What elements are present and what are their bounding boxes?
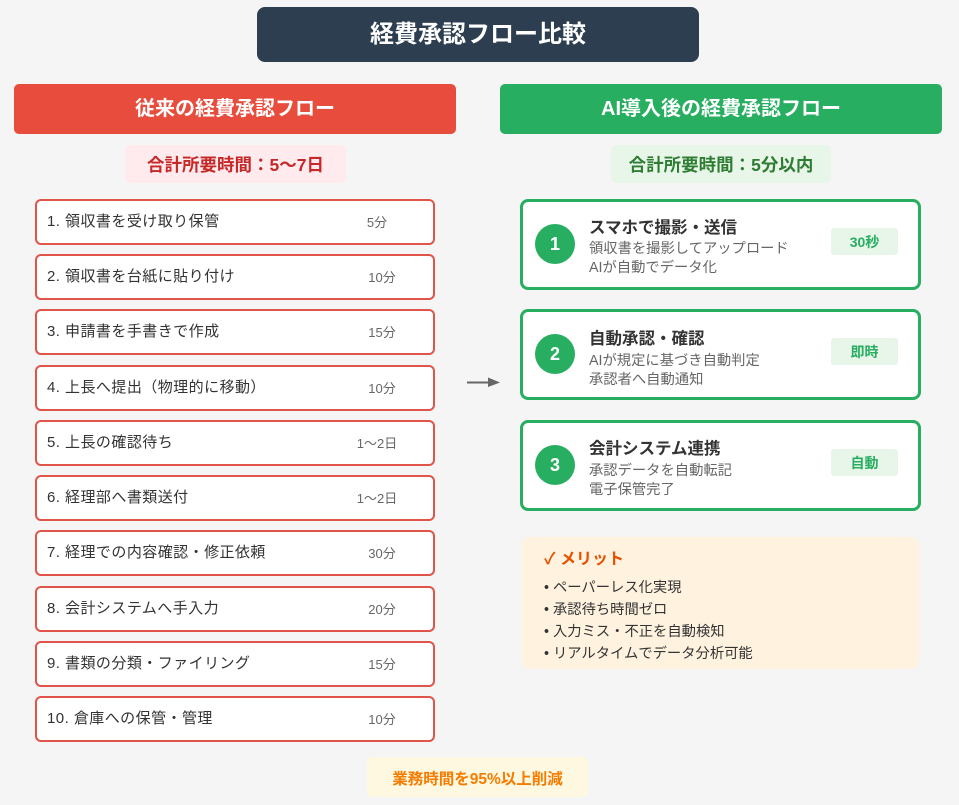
merits list xyxy=(544,580,753,662)
step 8: 20分 xyxy=(368,602,396,617)
step 8: 8. 会計システムへ手入力 xyxy=(47,600,219,616)
heading: AI flow: AI導入後の経費承認フロー xyxy=(601,98,841,120)
card title: スマホで撮影・送信 xyxy=(589,219,737,237)
number badge 2 xyxy=(535,334,575,374)
time badge: 30秒 xyxy=(850,234,879,250)
step 4: 10分 xyxy=(368,381,396,396)
step 6: 6. 経理部へ書類送付 xyxy=(47,488,189,506)
card description: 承認者へ自動通知 xyxy=(589,372,703,388)
step 10 xyxy=(35,696,435,742)
card description: AIが自動でデータ化 xyxy=(589,260,717,276)
card: step 3 xyxy=(520,420,921,511)
card description: AIが規定に基づき自動判定 xyxy=(589,352,760,368)
step 5 xyxy=(35,420,435,466)
step 1: 5分 xyxy=(367,215,387,230)
panel: merits xyxy=(522,537,919,669)
step 7: 7. 経理での内容確認・修正依頼 xyxy=(47,544,266,560)
step 1 xyxy=(35,199,435,245)
total time: traditional xyxy=(125,145,346,183)
card description xyxy=(589,352,760,388)
step 6: 1〜2日 xyxy=(357,491,397,506)
heading: AI flow xyxy=(500,84,942,134)
step 2: 2. 領収書を台紙に貼り付け xyxy=(47,268,235,284)
time badge xyxy=(831,228,898,255)
title: 経費承認フロー比較 xyxy=(370,21,586,48)
step 3 xyxy=(35,309,435,355)
arrow xyxy=(467,378,500,387)
step 4 xyxy=(35,365,435,411)
heading: traditional flow: 従来の経費承認フロー xyxy=(135,98,335,120)
number badge 2: 2 xyxy=(550,344,560,364)
time badge: 自動 xyxy=(850,454,878,470)
merits list: • 入力ミス・不正を自動検知 xyxy=(544,624,725,640)
card title: 会計システム連携 xyxy=(589,440,721,458)
step 10: 10分 xyxy=(368,712,396,727)
merits list: • リアルタイムでデータ分析可能 xyxy=(544,646,753,662)
step 7 xyxy=(35,530,435,576)
step 3: 15分 xyxy=(368,325,396,340)
step 2: 10分 xyxy=(368,270,396,285)
card description: 電子保管完了 xyxy=(589,482,675,498)
step 2 xyxy=(35,254,435,300)
merits list: • ペーパーレス化実現 xyxy=(544,580,682,596)
time badge xyxy=(831,449,898,476)
merits list: • 承認待ち時間ゼロ xyxy=(544,602,667,618)
step 1: 1. 領収書を受け取り保管 xyxy=(47,212,220,230)
callout: 95% reduction: 業務時間を95%以上削減 xyxy=(392,771,563,788)
step 3: 3. 申請書を手書きで作成 xyxy=(47,322,220,340)
step 10: 10. 倉庫への保管・管理 xyxy=(47,710,213,726)
time badge xyxy=(831,338,898,365)
step 5: 5. 上長の確認待ち xyxy=(47,434,173,450)
card: step 2 xyxy=(520,309,921,400)
title xyxy=(257,7,699,62)
card: step 1 xyxy=(520,199,921,290)
card description: 領収書を撮影してアップロード xyxy=(589,241,789,257)
callout: 95% reduction xyxy=(367,757,588,797)
step 9: 9. 書類の分類・ファイリング xyxy=(47,654,250,672)
step 7: 30分 xyxy=(368,546,396,561)
total time: traditional: 合計所要時間：5〜7日 xyxy=(147,154,324,174)
step 9: 15分 xyxy=(368,657,396,672)
card title: 自動承認・確認 xyxy=(589,330,704,348)
step 8 xyxy=(35,586,435,632)
step 4: 4. 上長へ提出（物理的に移動） xyxy=(47,378,266,396)
number badge 3 xyxy=(535,445,575,485)
merits heading: ✓ メリット xyxy=(544,551,624,568)
step 5: 1〜2日 xyxy=(357,436,397,451)
number badge 3: 3 xyxy=(550,454,560,474)
step 9 xyxy=(35,641,435,687)
number badge 1: 1 xyxy=(550,234,560,254)
card description xyxy=(589,240,789,276)
step 6 xyxy=(35,475,435,521)
card description xyxy=(589,462,732,498)
total time: AI xyxy=(611,145,831,183)
card description: 承認データを自動転記 xyxy=(589,462,732,478)
heading: traditional flow xyxy=(14,84,456,134)
time badge: 即時 xyxy=(850,344,878,360)
total time: AI: 合計所要時間：5分以内 xyxy=(629,154,813,174)
number badge 1 xyxy=(535,224,575,264)
